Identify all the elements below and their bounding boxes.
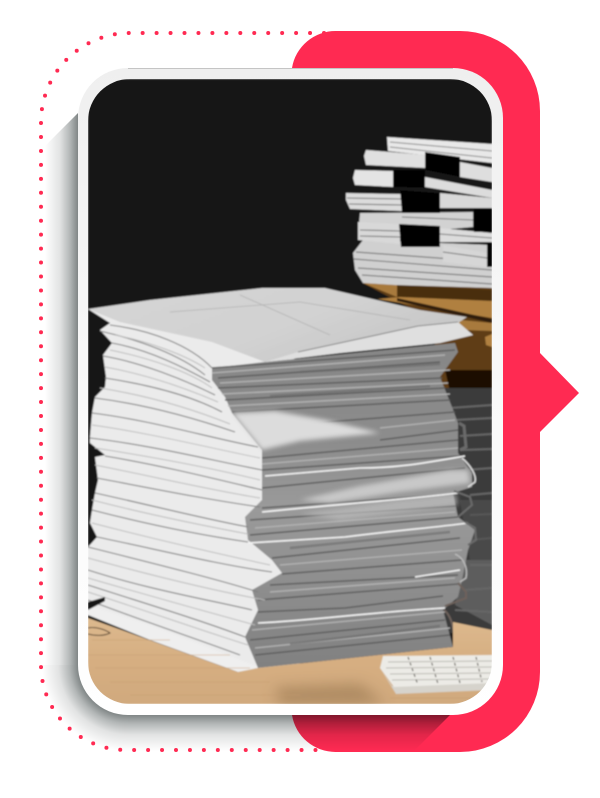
upper binder stack xyxy=(346,137,492,288)
stack: white left face xyxy=(88,309,300,672)
stack: grey right face xyxy=(212,343,475,668)
red callout shape with arrow xyxy=(292,31,579,752)
stack: light patch on the grey face xyxy=(232,411,380,450)
dotted outline xyxy=(41,33,324,750)
stack: edges on the white left face xyxy=(88,325,272,655)
white photo frame xyxy=(78,68,503,715)
desk surface xyxy=(88,597,492,704)
wooden tray behind the stack xyxy=(363,283,492,392)
stack: top sheet xyxy=(88,288,473,362)
binder edges at right xyxy=(459,423,466,450)
stack: bright sheet edges xyxy=(248,423,476,648)
black binder clips xyxy=(393,152,492,267)
background paper stack on the right xyxy=(440,388,492,633)
stack: edges on the grey face xyxy=(212,350,465,655)
calculator xyxy=(380,655,492,694)
photo background: dark wall xyxy=(88,79,492,704)
stack: bottom sheet on the desk xyxy=(88,611,237,672)
long drop shadow of the frame xyxy=(42,113,450,751)
main paper stack xyxy=(88,288,476,672)
photo: stacks of paper on a desk xyxy=(88,79,492,704)
